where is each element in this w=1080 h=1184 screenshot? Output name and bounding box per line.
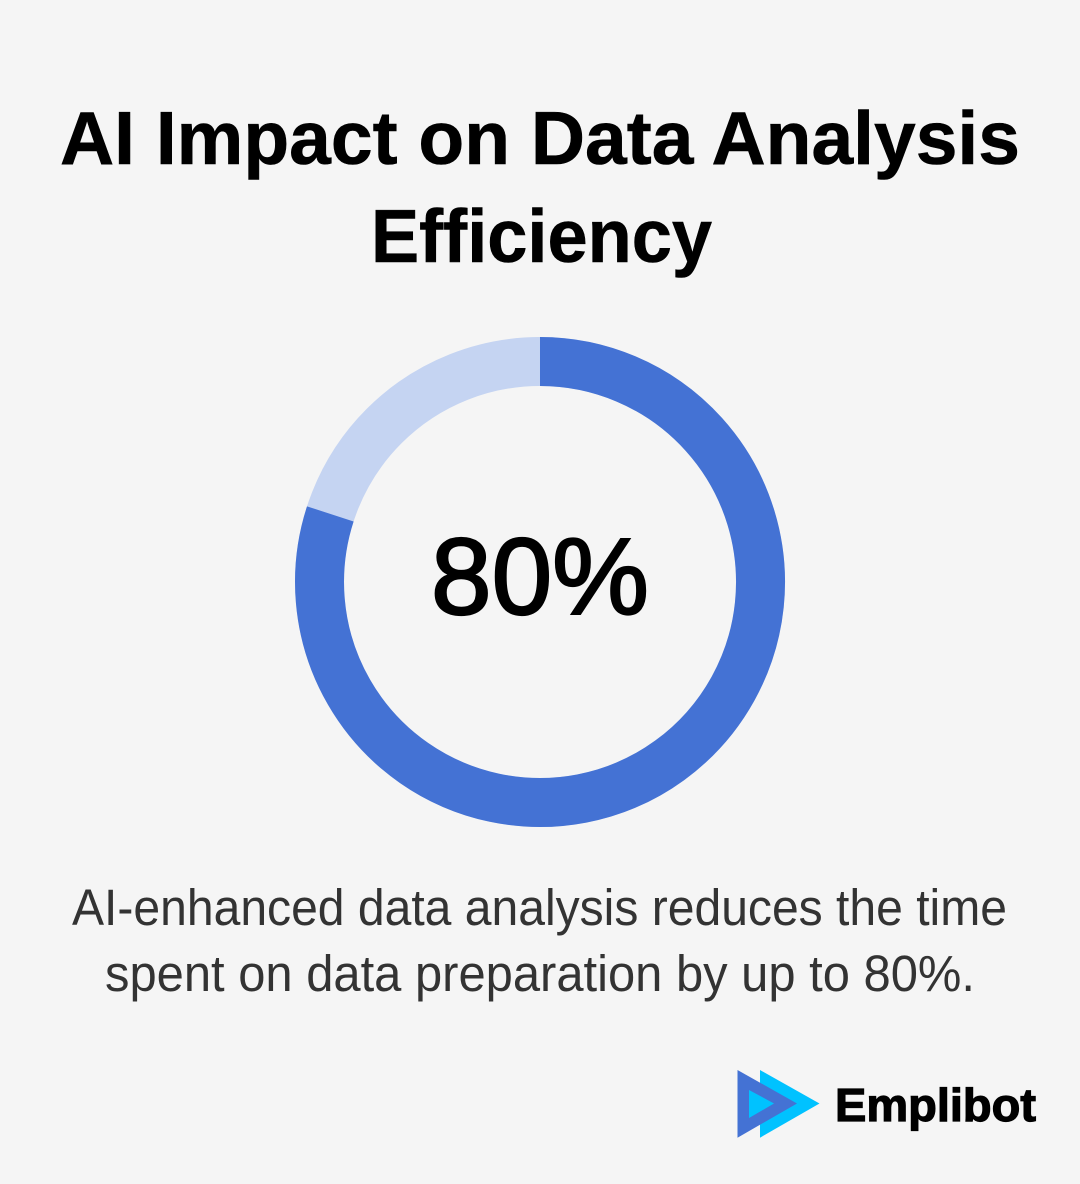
title (60, 96, 1020, 278)
icon: play triangles (738, 1070, 820, 1138)
logo: Emplibot (738, 1070, 1036, 1138)
description text: spent on data preparation by up to 80%. (105, 945, 975, 1002)
donut track: remaining 20% (320, 362, 760, 802)
donut segment: 80% (320, 362, 761, 802)
logo wordmark: Emplibot (835, 1079, 1036, 1131)
title: AI Impact on Data Analysis (60, 96, 1020, 180)
donut chart: 80% (320, 362, 761, 802)
donut value: 80% (431, 516, 649, 638)
description text: AI-enhanced data analysis reduces the time (72, 879, 1007, 936)
description text (72, 879, 1007, 1002)
title: Efficiency (371, 194, 712, 278)
